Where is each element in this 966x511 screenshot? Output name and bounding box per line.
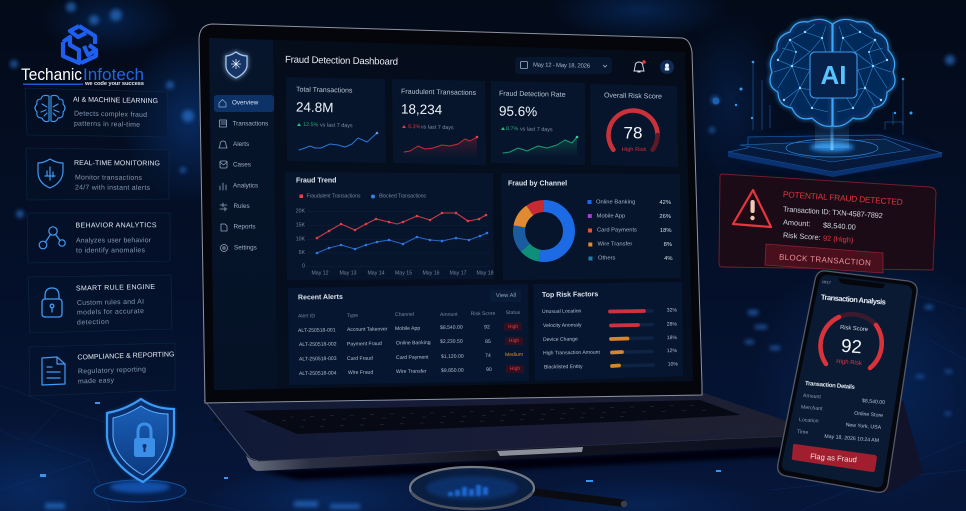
table: Status bbox=[506, 310, 521, 316]
table: Online Banking bbox=[396, 340, 431, 346]
transaction details: New York, USA bbox=[845, 422, 882, 431]
keyboard bbox=[244, 400, 741, 434]
panel: total transactions bbox=[286, 77, 386, 163]
transaction details: $8,540.00 bbox=[862, 398, 885, 406]
line chart: May 18 bbox=[476, 270, 494, 276]
score: Risk Score bbox=[840, 325, 868, 333]
icon: bell bbox=[634, 60, 646, 72]
legend: 26% bbox=[659, 214, 671, 220]
legend: Blocked Transactions bbox=[379, 194, 426, 200]
transaction details: Location bbox=[799, 417, 819, 425]
laptop lid bbox=[199, 24, 702, 403]
bar list: 18% bbox=[667, 335, 678, 341]
callout details bbox=[783, 205, 883, 245]
table bbox=[298, 310, 524, 377]
icon: logo hex cube bbox=[63, 26, 96, 63]
nav list: Reports bbox=[234, 224, 256, 230]
bar list: 10% bbox=[668, 362, 679, 368]
legend: 42% bbox=[659, 200, 671, 206]
bar list: High Transaction Amount bbox=[543, 350, 601, 356]
card label: Fraudulent Transactions bbox=[401, 89, 477, 97]
table: Type bbox=[347, 313, 358, 319]
light beam bbox=[815, 120, 849, 148]
legend bbox=[300, 193, 426, 200]
bar list bbox=[542, 308, 679, 370]
table: Channel bbox=[395, 312, 414, 318]
line chart: 20K bbox=[296, 208, 306, 214]
score: 92 bbox=[840, 335, 863, 357]
nav list: Alerts bbox=[233, 141, 249, 148]
logo: Techanic Infotech bbox=[21, 26, 144, 87]
icon: nodes bbox=[39, 227, 65, 249]
brain bbox=[770, 19, 895, 126]
icon: glowing shield with padlock on pedestal bbox=[94, 399, 186, 502]
button: flag as fraud bbox=[792, 444, 877, 472]
table: ALT-250518-003 bbox=[299, 356, 337, 362]
phone title: Transaction Analysis bbox=[821, 293, 886, 307]
legend: Wire Transfer bbox=[598, 242, 632, 248]
trend bbox=[297, 122, 353, 129]
table: 90 bbox=[486, 367, 492, 373]
bar list: 32% bbox=[667, 308, 678, 314]
icon: shield bbox=[38, 159, 63, 188]
score: 78 bbox=[624, 124, 642, 142]
panel: smart rule engine: models for accurate bbox=[77, 308, 144, 316]
legend: Others bbox=[598, 256, 615, 262]
line chart: 0 bbox=[302, 264, 305, 270]
panel: top risk factors bbox=[533, 282, 683, 381]
line chart: May 13 bbox=[339, 270, 357, 276]
laptop notch bbox=[497, 447, 583, 456]
transaction details: Transaction Details bbox=[805, 381, 856, 391]
table: Alert ID bbox=[298, 313, 315, 319]
panel: fraudulent transactions bbox=[392, 79, 486, 165]
transaction details: Merchant bbox=[801, 405, 823, 412]
nav list: Settings bbox=[234, 244, 257, 252]
table: Payment Fraud bbox=[347, 341, 382, 347]
button: view all bbox=[490, 290, 521, 302]
panel: overall risk score bbox=[590, 84, 678, 167]
trend bbox=[501, 126, 553, 133]
phone stand bbox=[860, 400, 923, 494]
table: 74 bbox=[485, 353, 491, 359]
panel: fraud trend bbox=[285, 172, 494, 280]
table: Account Takeover bbox=[347, 326, 388, 333]
callout heading: POTENTIAL FRAUD DETECTED bbox=[783, 189, 903, 207]
transaction details: Time bbox=[797, 429, 809, 436]
nav list: Overview bbox=[232, 100, 259, 106]
donut chart bbox=[519, 206, 569, 256]
trend: vs last 7 days bbox=[520, 127, 553, 133]
line chart: May 16 bbox=[422, 270, 440, 276]
table: Mobile App bbox=[395, 326, 420, 332]
value: 18,234 bbox=[401, 102, 443, 117]
panel: AI & machine learning bbox=[25, 88, 168, 137]
sparkline bbox=[404, 136, 478, 158]
callout details: 92 (High) bbox=[823, 234, 854, 245]
date picker: May 12 - May 18, 2026 bbox=[533, 63, 591, 70]
table: Card Payment bbox=[396, 355, 429, 361]
nav list bbox=[219, 100, 268, 252]
table: Medium bbox=[505, 352, 523, 358]
line chart: May 15 bbox=[395, 270, 412, 276]
table: $2,230.50 bbox=[440, 339, 463, 345]
panel: recent alerts bbox=[288, 284, 529, 385]
table: High bbox=[509, 338, 519, 344]
panel: fraud detection rate bbox=[491, 81, 585, 165]
nav item active bbox=[214, 95, 274, 112]
laptop shadow bbox=[262, 446, 790, 480]
logo wordmark: Techanic bbox=[21, 66, 82, 84]
line chart: 10K bbox=[296, 236, 306, 242]
panel: smart rule engine: detection bbox=[77, 319, 109, 326]
heading: Recent Alerts bbox=[298, 294, 343, 301]
laptop bbox=[199, 24, 790, 480]
heading: BEHAVIOR ANALYTICS bbox=[75, 222, 157, 229]
heading: Top Risk Factors bbox=[542, 291, 598, 299]
circuit traces bbox=[712, 61, 912, 135]
trend: 12.5% bbox=[303, 122, 319, 128]
text block: Monitor transactions bbox=[75, 175, 143, 182]
line chart: May 14 bbox=[367, 270, 385, 276]
nav list: Transactions bbox=[232, 120, 268, 128]
trend: vs last 7 days bbox=[320, 123, 353, 129]
line chart: May 12 bbox=[311, 270, 329, 276]
trend: 8.3% bbox=[408, 124, 421, 130]
date picker bbox=[515, 57, 612, 74]
legend bbox=[588, 200, 672, 262]
heading: Fraud Trend bbox=[296, 178, 336, 184]
table: High bbox=[508, 324, 518, 330]
score bbox=[836, 325, 868, 367]
line chart: May 17 bbox=[449, 270, 467, 276]
table: Wire Transfer bbox=[396, 369, 427, 375]
AI chip bbox=[810, 52, 857, 98]
icon: avatar bbox=[660, 60, 674, 74]
heading: COMPLIANCE & REPORTING bbox=[77, 351, 175, 361]
logo wordmark bbox=[21, 66, 144, 87]
transaction details: Online Store bbox=[854, 411, 883, 419]
text block: Regulatory reporting bbox=[78, 366, 146, 375]
callout: potential fraud detected bbox=[719, 174, 936, 273]
panel: real-time monitoring bbox=[26, 148, 169, 200]
AI chip: AI bbox=[820, 60, 846, 90]
heading: Fraud by Channel bbox=[508, 180, 567, 188]
bar list: Device Change bbox=[543, 337, 578, 343]
table: High bbox=[510, 366, 520, 372]
table: 85 bbox=[485, 339, 491, 345]
table: $1,120.00 bbox=[441, 354, 464, 360]
panel: behavior analytics bbox=[27, 213, 170, 263]
heading: SMART RULE ENGINE bbox=[76, 284, 155, 292]
phone body bbox=[778, 271, 917, 492]
phone with stand bbox=[778, 271, 923, 494]
callout details: Amount: bbox=[783, 218, 811, 228]
bar list: 12% bbox=[667, 348, 678, 354]
logo wordmark: Infotech bbox=[83, 66, 144, 84]
nav list: Rules bbox=[234, 203, 250, 210]
bar list: Blacklisted Entity bbox=[544, 364, 583, 370]
text block: Custom rules and AI bbox=[77, 299, 144, 307]
table: 92 bbox=[484, 324, 490, 331]
button: flag as fraud: Flag as Fraud bbox=[810, 452, 857, 464]
panel: compliance & reporting bbox=[29, 343, 175, 396]
panel: sidebar bbox=[209, 38, 277, 390]
nav list: Analytics bbox=[233, 182, 258, 190]
text block: Analyzes user behavior bbox=[76, 237, 152, 244]
table: Amount bbox=[440, 312, 458, 318]
panel: fraud by channel bbox=[501, 173, 681, 280]
gauge bbox=[820, 314, 882, 368]
platform bbox=[728, 135, 942, 177]
icon: shield logo bbox=[226, 52, 247, 78]
text block: Detects complex fraud bbox=[74, 111, 147, 119]
value: 24.8M bbox=[296, 100, 334, 115]
logo wordmark: we code your success bbox=[84, 81, 144, 87]
icon: brain bbox=[35, 95, 65, 122]
legend: 8% bbox=[664, 242, 672, 248]
gauge bbox=[608, 110, 658, 150]
button: block transaction: BLOCK TRANSACTION bbox=[779, 253, 871, 268]
button: block transaction bbox=[765, 244, 883, 273]
rating: High Risk bbox=[622, 147, 646, 153]
bar list: Velocity Anomaly bbox=[543, 322, 582, 329]
sparkline bbox=[299, 132, 378, 150]
callout details: Risk Score: bbox=[783, 231, 821, 242]
trend bbox=[402, 124, 454, 131]
icon: AI brain hologram bbox=[712, 19, 942, 177]
table: Card Fraud bbox=[347, 356, 373, 362]
heading: REAL-TIME MONITORING bbox=[74, 160, 160, 167]
icon: document bbox=[42, 357, 65, 385]
trend: 8.7% bbox=[506, 126, 519, 132]
line chart bbox=[296, 208, 494, 276]
transaction details: Amount bbox=[803, 393, 822, 400]
table: Wire Fraud bbox=[348, 370, 373, 376]
icon: warning triangle bbox=[733, 190, 771, 227]
panel: behavior analytics: to identify anomalies bbox=[76, 247, 146, 254]
nav list: Cases bbox=[233, 162, 251, 168]
icon: lock bbox=[42, 288, 62, 317]
table: ALT-250518-002 bbox=[299, 341, 337, 348]
table: ALT-250518-001 bbox=[298, 327, 336, 334]
transaction details bbox=[797, 381, 885, 444]
legend: 4% bbox=[664, 256, 672, 262]
button: view all: View All bbox=[496, 293, 516, 299]
transaction details: May 18, 2026 10:24 AM bbox=[824, 434, 879, 444]
card label: Fraud Detection Rate bbox=[499, 91, 566, 99]
title: Fraud Detection Dashboard bbox=[285, 55, 398, 68]
legend: Mobile App bbox=[596, 214, 625, 220]
icon: magnifying glass bbox=[410, 467, 627, 509]
legend: Fraudulent Transactions bbox=[306, 193, 361, 199]
line chart: 15K bbox=[296, 222, 306, 228]
table: $9,850.00 bbox=[441, 368, 464, 374]
table: ALT-250518-004 bbox=[299, 370, 337, 377]
sparkline bbox=[503, 136, 578, 157]
line chart: 5K bbox=[299, 250, 306, 256]
panel: AI & machine learning: patterns in real-time bbox=[74, 121, 140, 129]
score: High Risk bbox=[836, 359, 863, 367]
trend: vs last 7 days bbox=[421, 125, 454, 131]
card label: Total Transactions bbox=[296, 87, 353, 95]
bar list: Unusual Location bbox=[542, 308, 582, 315]
table: Risk Score bbox=[471, 311, 496, 317]
heading: AI & MACHINE LEARNING bbox=[73, 97, 158, 105]
laptop base bbox=[204, 392, 790, 471]
legend: Online Banking bbox=[596, 200, 635, 206]
laptop screen bbox=[209, 38, 693, 390]
panel: compliance & reporting: made easy bbox=[78, 377, 115, 385]
callout details: Transaction ID: TXN-4587-7892 bbox=[783, 205, 883, 220]
table: $8,540.00 bbox=[440, 325, 463, 331]
card label: Overall Risk Score bbox=[604, 92, 662, 101]
panel: smart rule engine bbox=[28, 275, 172, 333]
legend: 18% bbox=[660, 228, 672, 234]
phone screen bbox=[782, 275, 912, 487]
callout details: $8,540.00 bbox=[823, 221, 856, 232]
legend: Card Payments bbox=[597, 228, 637, 234]
value: 95.6% bbox=[499, 104, 537, 119]
phone screen: 10:17 bbox=[822, 280, 831, 285]
panel: real-time monitoring: 24/7 with instant alerts bbox=[75, 185, 151, 192]
bar list: 28% bbox=[667, 322, 678, 328]
